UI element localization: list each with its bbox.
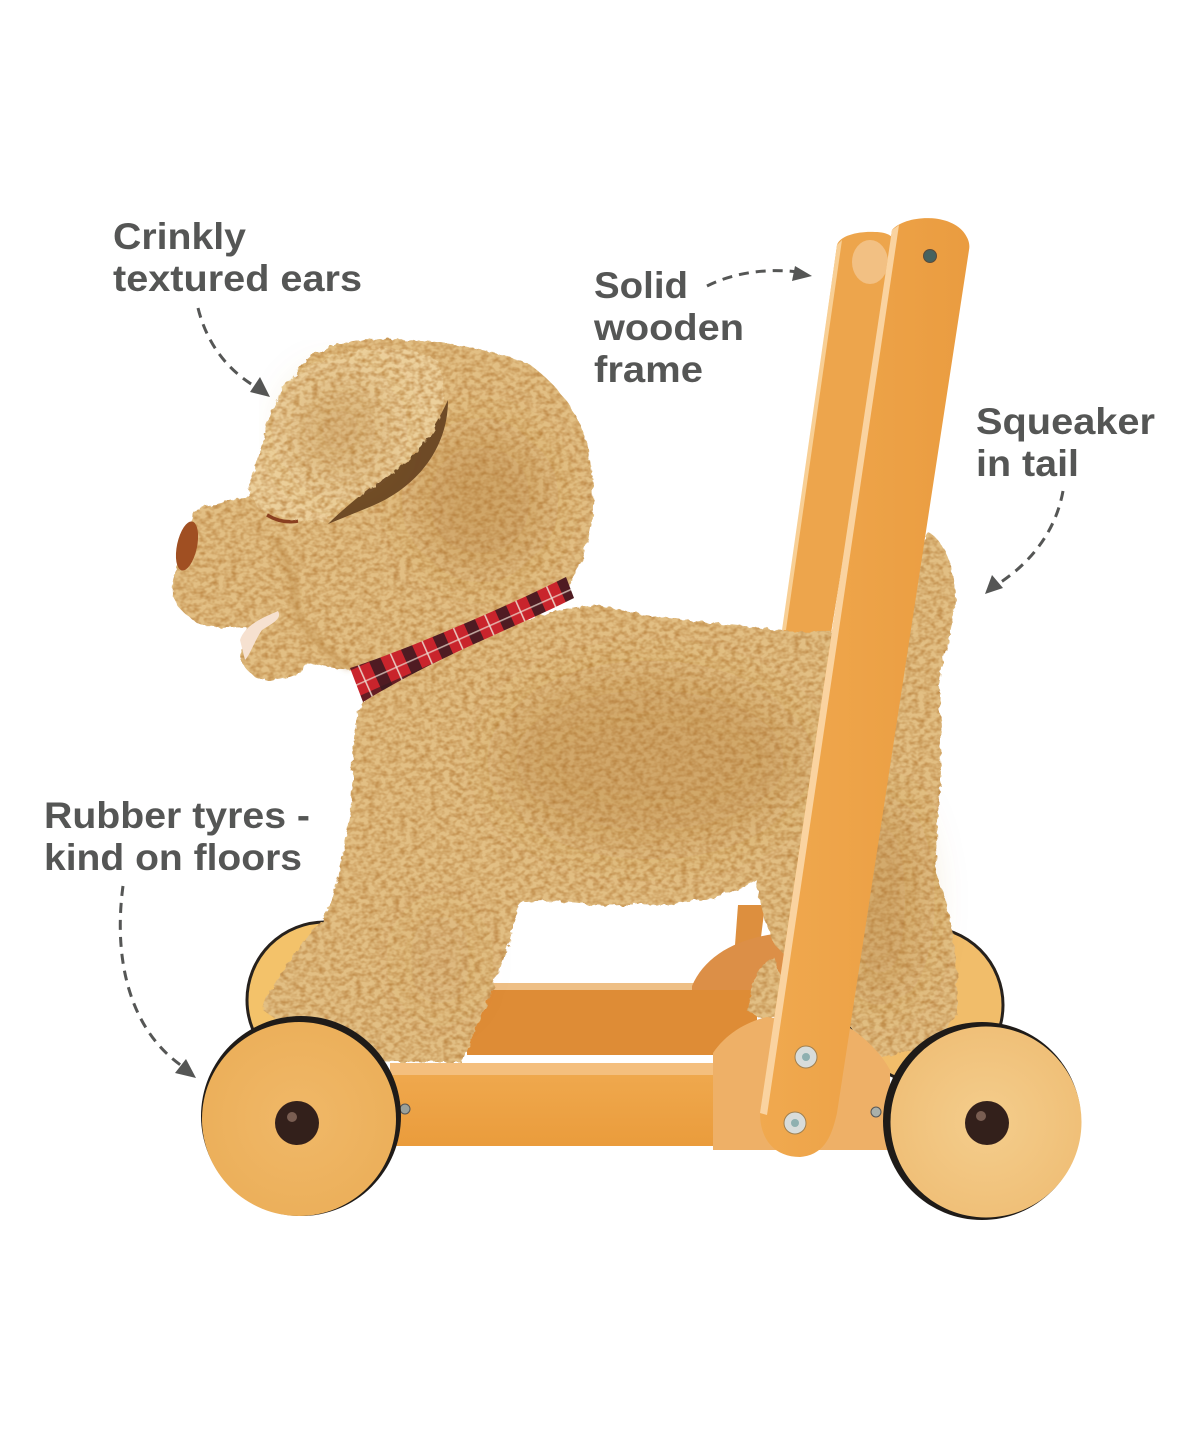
shadow under ear — [328, 400, 448, 524]
label: Crinkly textured ears: Crinkly — [113, 216, 246, 257]
callout: Solid wooden frame — [593, 265, 812, 390]
far post of handle — [782, 232, 894, 640]
dog mouth — [240, 611, 279, 660]
callout: Squeaker in tail — [976, 401, 1155, 594]
far frame rail — [467, 905, 785, 1055]
label: Solid wooden frame: frame — [594, 349, 703, 390]
label: Squeaker in tail: in tail — [976, 443, 1079, 484]
hind leg lower fur — [748, 958, 790, 1020]
body shading — [410, 675, 920, 1010]
hub — [965, 1101, 1009, 1145]
ear inner shading — [295, 380, 385, 480]
far left wheel — [247, 922, 403, 1078]
label: Solid wooden frame: Solid — [594, 265, 688, 306]
label: Rubber tyres - kind on floors: kind on floors — [44, 837, 302, 878]
muzzle crease — [275, 540, 350, 668]
near frame rail — [390, 1063, 720, 1146]
dog nose — [172, 519, 202, 573]
head shading — [415, 430, 545, 570]
dog head — [173, 339, 593, 680]
tartan collar — [350, 577, 574, 702]
label: Solid wooden frame: wooden — [593, 307, 744, 348]
arrow: to ear — [198, 308, 270, 397]
dog ear — [250, 348, 443, 521]
callout: Rubber tyres — [44, 795, 310, 1078]
product: dog walker — [172, 218, 1081, 1220]
dog body — [263, 532, 958, 1062]
far right wheel — [847, 927, 1003, 1083]
hub — [275, 1101, 319, 1145]
near handle — [760, 218, 969, 1157]
arrow: to tyre — [120, 886, 196, 1078]
eye — [267, 515, 298, 522]
screw: lower — [784, 1112, 806, 1134]
screw: middle — [795, 1046, 817, 1068]
near right wheel — [883, 1022, 1082, 1220]
label: Crinkly textured ears: textured ears — [113, 258, 362, 299]
callout: Crinkly textured ears — [113, 216, 362, 397]
label: Rubber tyres - kind on floors: Rubber tyres - — [44, 795, 310, 836]
label: Squeaker in tail: Squeaker — [976, 401, 1155, 442]
axle bracket — [713, 1017, 890, 1150]
screw: top — [924, 250, 936, 262]
arrow: to frame — [707, 266, 812, 286]
arrow: to tail — [985, 491, 1063, 594]
near left wheel — [201, 1016, 401, 1216]
